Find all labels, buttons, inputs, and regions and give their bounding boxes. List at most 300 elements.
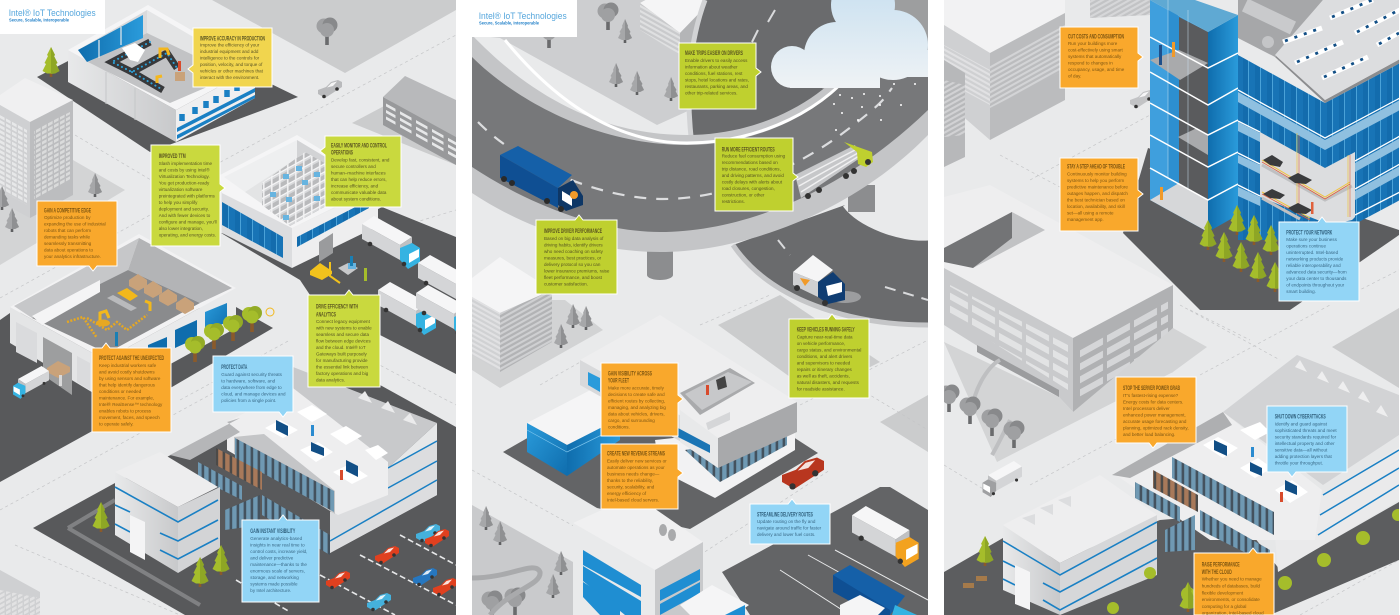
callout: improved TTM: and costs by using Intel® [159,167,210,173]
callout: drive efficiency: ANALYTICS [316,311,336,318]
callout: drive efficiency: Connect legacy equipment [316,319,371,324]
callout: competitive edge: GAIN A COMPETITIVE EDGE [44,207,91,214]
callout: keep vehicles running: repairs or itinerary changes [797,367,853,372]
roof with desks [1225,0,1400,103]
callout: drive efficiency [308,290,380,387]
callout: stay ahead of trouble: outages happen, and dispatch [1067,191,1128,196]
callout: improve accuracy: vehicles or other machines that [200,69,264,74]
callout: efficient routes: Reduce fuel consumption using [722,154,786,159]
icons: gray pine trees [0,173,102,232]
snowflakes [833,83,916,131]
callout: efficient routes: construction, or other [722,193,765,198]
callout: visibility across fleet: efficient routes by collecting, [608,398,665,403]
road markings [472,295,928,555]
callout: protect data: PROTECT DATA [221,364,247,371]
callout: shut down cyberattacks: adding protection layers that [1275,454,1333,459]
top right road [860,0,928,60]
callout: drive efficiency: Gateways built purposely [316,352,368,356]
forklift and workers [310,256,367,283]
gray warehouse [383,76,456,165]
callout: improved TTM: operating, and energy costs. [159,233,216,238]
callout: easily monitor: EASILY MONITOR AND CONTROL [331,143,387,150]
callout: protect your network: reliable interoperability and [1286,263,1341,268]
callout: new revenue: energy efficiency of [607,491,647,496]
red car [782,458,824,490]
callout: driver performance: measures, best practices, or [544,256,602,260]
worker [59,375,62,386]
callout: protect against the unexpected: conditions or needed [99,389,142,394]
dashed road lines [944,115,1399,615]
delivery truck on ramp [793,255,861,306]
callout: improved TTM: Slash implementation time [159,161,212,166]
callout: efficient routes: restrictions. [722,199,745,204]
upper road under ramp [686,0,836,135]
callout: easily monitor: that can help reduce errors, [331,177,387,182]
dark lot: central building [503,405,818,529]
callout: stay ahead of trouble: predictive maintenance before [1067,185,1128,190]
callout: stay ahead of trouble: management app. [1067,217,1104,222]
callout: raise performance: WITH THE CLOUD [1202,569,1232,576]
callout: shut down cyberattacks: SHUT DOWN CYBERATTACKS [1275,414,1326,421]
callout: instant visibility: by Intel architecture. [250,588,291,593]
callout: stay ahead of trouble: Continuously monitor building [1067,172,1127,177]
callout: protect data: policies from a single point. [221,398,276,403]
callout: improved TTM: You get production-ready [159,181,210,186]
callout: keep vehicles running [789,314,869,398]
callout: make trips easier: Enable drivers to easily access [685,58,748,63]
callout: improved TTM: IMPROVED TTM [159,153,186,160]
callout: driver performance: lower insurance premiums, raise [544,268,610,274]
callout: protect your network: smart building. [1286,289,1316,294]
desks and monitors [1203,422,1308,503]
callout: streamline delivery: Update routing on the fly and [757,519,816,524]
callout: protect data: to hardware, software, and [221,378,276,384]
callout: new revenue: Easily deliver new services or [607,459,667,464]
highway rim [472,35,928,252]
callout: visibility across fleet: GAIN VISIBILITY ACROSS [608,370,652,377]
callout: server power grab: and better load balancing. [1123,432,1175,437]
callout: cut costs: systems that automatically [1068,54,1122,59]
callout: shut down cyberattacks: security standards required for [1275,435,1337,440]
office desks with monitors [265,405,388,484]
right lot [880,395,928,452]
callout: efficient routes: RUN MORE EFFICIENT ROUTES [722,146,775,153]
callout: protect against the unexpected: Intel® RealSense™ technology [99,401,163,407]
data center large building [1112,355,1399,572]
callout: instant visibility: systems made possible [250,582,298,586]
callout: shut down cyberattacks: sensitive data—all without [1275,448,1328,453]
callout: protect against the unexpected: PROTECT AGAINST THE UNEXPECTED [99,355,164,362]
callout: competitive edge [37,201,117,271]
callout: keep vehicles running: Capture near-real-time data [797,335,853,340]
gray building top left [944,0,1150,140]
parking bays [236,535,456,615]
callout: make trips easier: other trip-related services. [685,90,738,96]
callout: keep vehicles running: for roadside assistance. [797,387,845,392]
callout: efficient routes [715,138,798,211]
callout: keep vehicles running: natural disasters, and requests [797,380,860,385]
callout: cut costs: cost-effectively using smart [1068,48,1123,52]
callout: driver performance: Based on big data analysis of [544,236,604,241]
blue delivery truck bottom [833,565,917,615]
callout: stay ahead of trouble: the best technician based on [1067,198,1125,203]
callout: raise performance: Whether you need to manage [1202,577,1262,582]
gray trees [479,506,568,615]
callout: improve accuracy: intelligence to the controls for [200,56,260,61]
callout: easily monitor: communicate valuable data [331,190,387,195]
callout: protect your network: networking products provide [1286,256,1344,262]
callout: make trips easier: MAKE TRIPS EASIER ON DRIVERS [685,50,743,57]
callout: streamline delivery: STREAMLINE DELIVERY ROUTES [757,511,813,518]
callout: driver performance: fleet performance, and boost [544,275,603,280]
gray lot inside interchange [492,0,687,125]
callout: raise performance: computing for a global [1202,604,1246,609]
callout: protect your network: operations continue [1286,244,1326,248]
callout: competitive edge: demanding tasks while [44,234,90,240]
bottom left gray building [0,570,40,615]
callout: protect data: Guard against security threats [221,372,283,377]
callout: raise performance: environments, or consolidate [1202,597,1260,602]
callout: protect against the unexpected: movement, faces, and speech [99,415,160,420]
callout: shut down cyberattacks: sophisticated threats and meet [1275,428,1337,433]
truck at loading dock [13,366,49,399]
callout: protect data: data everywhere from edge to [221,385,282,390]
dark lot: assembly building [0,307,273,482]
road markings [0,35,456,615]
callout: protect your network: uninterrupted. Intel-based [1286,250,1339,255]
callout: instant visibility: control costs, increase yield, [250,549,307,554]
callout: shut down cyberattacks: intellectual property and other [1275,441,1335,446]
main blue building [1238,55,1400,240]
callout: easily monitor: Develop fast, consistent, and [331,158,390,163]
large gray building [944,185,1173,412]
callout: easily monitor: about system conditions. [331,197,381,202]
callout: improve accuracy: position, velocity, and torque of [200,62,263,67]
icon: gray tree top right [316,18,338,45]
header: panel one brand: Secure, Scalable, Interoperable [9,18,69,22]
callout: driver performance [536,215,617,294]
callout: driver performance: customer satisfaction. [544,282,588,286]
callout: easily monitor: OPERATIONS [331,150,353,157]
header: panel two brand: Intel® IoT Technologies [479,11,567,22]
callout: driver performance: driving habits, identify drivers [544,242,603,248]
callout: drive efficiency: data analytics. [316,378,345,382]
callout: keep vehicles running: and supervisors to needed [797,361,851,366]
callout: keep vehicles running: as well as theft, accidents, [797,374,850,379]
callout: competitive edge: data about operations to [44,248,94,252]
callout: efficient routes: road closures, congestion, [722,186,775,191]
callout: drive efficiency: DRIVE EFFICIENCY WITH [316,303,358,310]
callout: drive efficiency: and the cloud. Intel® IoT [316,344,366,350]
path in lot [472,568,540,615]
cloud [771,0,928,88]
blue tower [1150,0,1238,232]
callout: protect against the unexpected [92,343,171,432]
block front [115,452,220,573]
callout: drive efficiency: seamless and secure data [316,332,370,337]
callout: protect against the unexpected: to operate safely. [99,422,134,426]
callout: new revenue [601,444,683,509]
callout: make trips easier: conditions, fuel stations, rest [685,71,743,76]
callout: stay ahead of trouble: STAY A STEP AHEAD OF TROUBLE [1067,164,1125,171]
gray lot top right [212,0,456,73]
callout: instant visibility: enormous scale of servers, [250,568,305,574]
callout: easily monitor: increase efficiency, and [331,184,379,189]
callout: visibility across fleet [601,363,683,436]
access path [68,500,200,605]
callout: protect against the unexpected: that help identify dangerous [99,382,156,388]
callout: streamline delivery [750,499,830,544]
header: panel two brand: Secure, Scalable, Interoperable [479,20,539,26]
highway lane markings [478,88,892,199]
callout: improved TTM: configure and manage, you'll [159,220,217,225]
callout: improved TTM: deployment and security. [159,207,209,212]
cutaway floors with machines [1260,132,1355,225]
dark lot under tower [1123,148,1399,310]
gray trees row [938,384,1024,448]
callout: server power grab: IT's fastest-rising expense? [1123,393,1179,398]
callout: improve accuracy: interact with the environment. [200,75,259,80]
callout: stay ahead of trouble: location, availability, and skill [1067,204,1125,209]
header: panel two brand [472,0,577,37]
callout: drive efficiency: flow between edge devices [316,338,371,344]
callout: instant visibility: and deliver predictive [250,556,294,560]
callout: improved TTM: preintegrated with platforms [159,194,216,199]
callout: instant visibility: maintenance—thanks to the [250,562,307,567]
callout: new revenue: security, scalability, and [607,485,655,490]
truck with blue cab [362,216,420,269]
gray tower top [640,0,702,54]
callout: server power grab: STOP THE SERVER POWER GRAB [1123,385,1180,392]
lot behind gray warehouse [352,106,456,165]
callout: efficient routes: recommendations based on [722,160,778,165]
dark lot: building cluster [221,207,456,374]
pillars [647,185,875,280]
callout: improved TTM: virtualization software [159,187,203,192]
panel: logistics [472,0,928,615]
log truck [795,142,873,199]
callout: new revenue: automate operations as your [607,465,665,470]
callout: improved TTM [151,145,225,246]
callout: instant visibility [242,515,319,602]
right lot [1332,308,1399,388]
callout: improved TTM: also lower integration, [159,226,203,231]
callout: easily monitor: human–machine interfaces [331,171,386,176]
callout: protect your network: of endpoints throughout your [1286,282,1345,288]
callout: visibility across fleet: conditions. [608,424,630,429]
block in front [1003,475,1157,615]
callout: cut costs: CUT COSTS AND CONSUMPTION [1068,33,1124,40]
header: panel one brand: Intel® IoT Technologies [9,8,96,19]
building: data center [170,367,437,555]
callout: driver performance: IMPROVE DRIVER PERFORMANCE [544,228,602,235]
callout: driver performance: delivery protocol so you can [544,262,601,267]
callout: improve accuracy: IMPROVE ACCURACY IN PRODUCTION [200,36,265,42]
callout: stay ahead of trouble: set—all using a remote [1067,211,1114,216]
callout: protect your network [1279,217,1359,301]
panel: manufacturing [0,0,476,615]
callout: drive efficiency: for manufacturing provide [316,358,368,363]
dark lot: data center [33,385,456,615]
icon: green tree [42,47,60,77]
row of green trees [185,306,262,362]
callout: protect data: cloud, and manage devices and [221,392,286,396]
callout: cut costs: of day. [1068,74,1081,78]
callout: drive efficiency: factory operations and big [316,371,369,376]
callout: efficient routes: trip distance, road conditions, [722,167,781,172]
callout: new revenue: thanks to the reliability, [607,478,653,483]
callout: new revenue: business needs change— [607,472,660,477]
callout: protect your network: Make sure your business [1286,237,1338,242]
callout: keep vehicles running: conditions, and alert drivers [797,354,853,359]
lots under highway [718,295,880,395]
callout: competitive edge: Optimize production by [44,215,91,220]
callout: improved TTM: to help you simplify [159,200,198,205]
callout: server power grab: accurate usage forecasting and [1123,419,1187,424]
callout: easily monitor: secure controllers and [331,164,376,169]
highway deck [472,57,928,232]
callout: shut down cyberattacks: Identify and guard against [1275,422,1328,427]
callout: stay ahead of trouble: systems to help you perform [1067,178,1124,183]
callout: improve accuracy [188,28,272,87]
callout: instant visibility: storage, and networking [250,575,299,580]
building with blue stripes [573,495,703,615]
orange-cab truck [852,506,919,567]
callout: server power grab: enhanced power management, [1123,412,1186,418]
gray trees [538,2,678,101]
narrow gray building [944,60,965,167]
callout: protect against the unexpected: maintenance. For example, [99,396,154,400]
dark lot: production building [37,60,298,152]
callout: instant visibility: Generate analytics-based [250,536,303,541]
callout: raise performance: flexible development [1202,590,1244,595]
callout: make trips easier: restaurants, parking areas, and [685,84,748,89]
left gray tower [472,257,552,372]
callout: efficient routes: and driving patterns, and avoid [722,173,784,178]
callout: driver performance: who need coaching on safety [544,249,604,254]
callout: improved TTM: And with fewer devices to [159,213,211,218]
callout: server power grab [1116,377,1196,448]
gray car by tower [1130,90,1154,108]
callout: cut costs: occupancy, usage, and time [1068,67,1125,72]
callout: cut costs [1060,27,1143,88]
icons: trees and benches [963,509,1400,614]
dark lot bottom right [722,487,928,615]
callout: competitive edge: robots that can perform [44,228,91,233]
parked trucks [378,255,456,335]
parked cars [326,524,457,611]
callout: easily monitor [320,136,401,207]
building: production floor [68,5,255,142]
icon: cyclist [266,308,274,316]
callout: instant visibility: insights in near real time to [250,542,305,548]
callout: protect your network: your data center to thousands [1286,276,1347,281]
tower left [0,97,73,218]
callout: instant visibility: GAIN INSTANT VISIBILITY [250,528,296,535]
loading bay [977,345,1059,397]
gray pine trees by tower [554,304,593,348]
blue truck on highway [500,146,583,212]
callout: keep vehicles running: on vehicle performance, [797,341,845,346]
callout: raise performance [1194,548,1274,615]
building: assembly floor [10,234,236,400]
header: panel one brand [0,0,105,34]
callout: streamline delivery: delivery and lower fuel costs. [757,532,815,537]
lot behind left tower [0,160,125,265]
callout: protect against the unexpected: enables robots to process [99,408,152,414]
callout: visibility across fleet: data about vehicles, drivers, [608,411,665,416]
callout: protect against the unexpected: by using sensors and software [99,376,161,381]
callout: new revenue: Intel-based cloud servers. [607,498,659,503]
callout: visibility across fleet: YOUR FLEET [608,378,629,385]
callout: keep vehicles running: KEEP VEHICLES RUNNING SAFELY [797,327,855,334]
callout: protect your network: PROTECT YOUR NETWORK [1286,229,1332,236]
callout: visibility across fleet: managing, and analyzing big [608,405,666,410]
lower ramp [733,205,928,325]
lane lines [780,550,928,615]
callout: competitive edge: seamlessly transmitting [44,241,92,246]
callout: server power grab: Energy costs for data centers. [1123,400,1183,404]
callout: protect against the unexpected: Keep industrial workers safe [99,363,157,368]
callout: protect against the unexpected: and avoid costly shutdowns [99,370,155,374]
callout: improve accuracy: Improve the efficiency of your [200,43,260,48]
callout: raise performance: hundreds of databases, build [1202,584,1261,588]
highway inner edge [505,40,860,143]
driveway [972,360,1010,455]
blue glass building [527,385,640,476]
callout: streamline delivery: navigate around traffic for faster [757,526,822,530]
callout: protect data [213,356,293,417]
building: control operations [220,135,380,268]
callout: competitive edge: your analytics infrastructure. [44,254,101,259]
panel: smart buildings [938,0,1400,615]
delivery truck gray [983,461,1022,497]
conveyor with robots [112,42,185,90]
dark road bottom [944,500,1399,615]
callout: visibility across fleet: cargo, and surrounding [608,418,655,423]
callout: server power grab: Intel processors deliver [1123,406,1170,411]
callout: make trips easier: information about weather [685,64,738,70]
callout: shut down cyberattacks: throttle your throughput. [1275,461,1323,466]
callout: raise performance: RAISE PERFORMANCE [1202,562,1240,569]
central fleet building [580,315,797,498]
small roof [680,585,749,615]
callout: drive efficiency: the essential link between [316,364,369,370]
callout: stay ahead of trouble [1060,158,1143,231]
callout: cut costs: respond to changes in [1068,60,1113,66]
lot with trees and driveway [944,328,1207,462]
icons: green trees [92,502,230,587]
callout: drive efficiency: with new systems to enable [316,326,372,330]
callout: protect your network: advanced data security—from [1286,270,1347,274]
worker on assembly floor [115,332,118,346]
callout: cut costs: Run your buildings more [1068,41,1118,46]
lot: left gray tower [472,300,603,388]
callout: server power grab: planning, optimized rack density, [1123,426,1189,430]
callout: improved TTM: Virtualization Technology. [159,174,210,179]
callout: new revenue: CREATE NEW REVENUE STREAMS [607,451,665,458]
callout: visibility across fleet: decisions to create safe and [608,392,665,397]
bottom-left lot [472,505,573,615]
callout: visibility across fleet: Make more accurate, timely [608,385,665,390]
green pine trees [1200,205,1284,292]
callout: competitive edge: expanding the use of industrial [44,222,106,226]
callout: keep vehicles running: cargo status, and environmental [797,348,861,353]
callout: shut down cyberattacks [1267,406,1347,477]
callout: improve accuracy: industrial equipment and add [200,49,259,54]
callout: make trips easier: stops, hotel locations and rates, [685,78,749,82]
callout: efficient routes: costly delays with alerts about [722,180,783,185]
